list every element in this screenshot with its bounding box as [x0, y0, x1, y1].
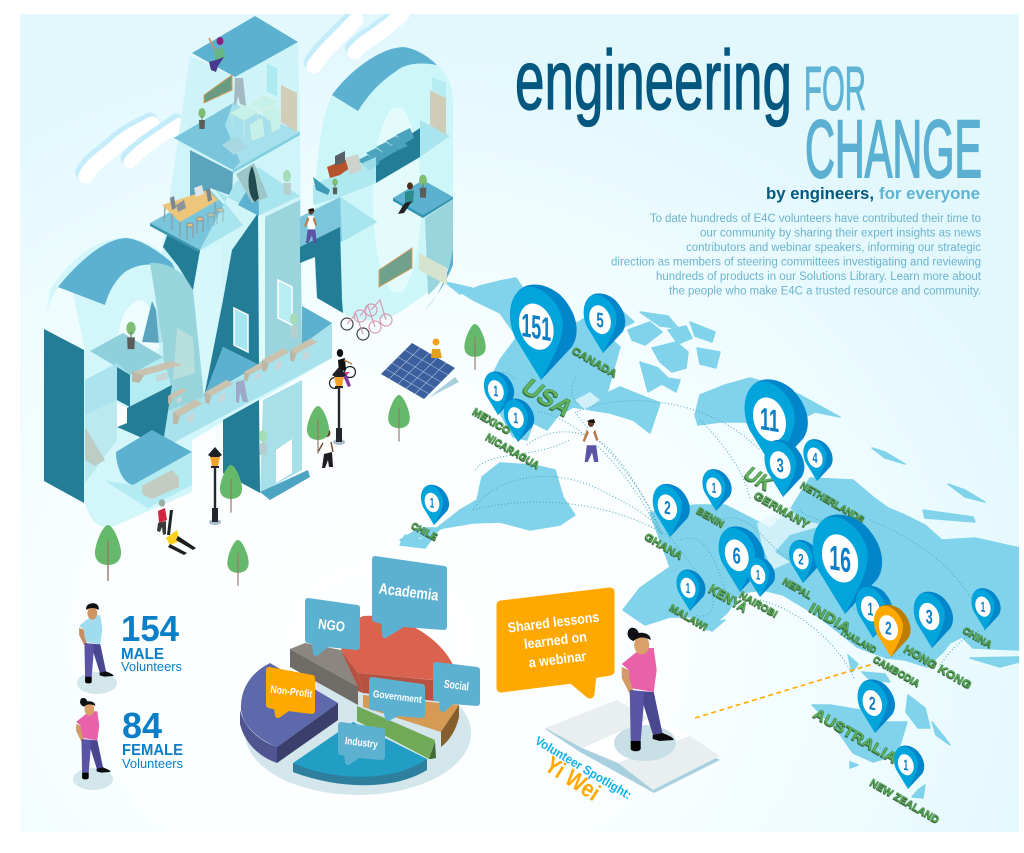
stairs [236, 163, 268, 203]
person: seated right [398, 182, 414, 214]
stairs E [85, 427, 105, 466]
pie chart: sectors [240, 616, 471, 795]
letter 4 body: translucent glass [155, 42, 302, 412]
label: CAMBODIA: CAMBODIA [871, 654, 922, 689]
stats: male volunteers [77, 603, 182, 694]
bubble: Social: Social [443, 679, 470, 694]
pin: Cambodia 2 highlighted: 2 [885, 617, 892, 639]
letter E: outer pale glow [44, 280, 85, 350]
label: NEPAL: NEPAL [781, 576, 814, 601]
pin: Netherlands 4 [803, 439, 833, 481]
label: CANADA: CANADA [570, 345, 620, 380]
pin: Hong Kong 3 [914, 592, 953, 648]
sector NGO side [290, 649, 358, 705]
classroom: pale desk [222, 136, 248, 155]
sector Government top [357, 706, 435, 759]
sector Academia top [341, 616, 455, 682]
label: GHANA: GHANA [642, 531, 685, 562]
4: dark diagonal face [163, 233, 200, 290]
C: left upper floor [313, 157, 376, 205]
sector Academia side [358, 673, 453, 703]
lamp post: left [208, 447, 222, 525]
classroom: bookshelf [281, 85, 297, 132]
clouds [83, 12, 402, 176]
pale plants [290, 313, 298, 338]
C plant [419, 175, 427, 198]
C: dark bar lower [300, 227, 343, 313]
letter E: dark left face [44, 329, 84, 503]
C: right floor edge [393, 197, 453, 218]
pin: Germany 3 [764, 440, 804, 497]
trees [95, 324, 486, 586]
pin: India 16: 16 [829, 538, 851, 581]
bubble: Government [372, 680, 423, 718]
E plant [126, 322, 136, 349]
pin: New Zealand 1: 1 [903, 757, 909, 775]
person: teacher [234, 78, 246, 106]
pin: Malawi 1: 1 [686, 581, 690, 597]
C: right floor [393, 180, 453, 215]
4: narrow pale column [259, 212, 265, 362]
title block [515, 33, 982, 298]
label: CHINA: CHINA [961, 625, 994, 650]
label: NEW ZEALAND: NEW ZEALAND [868, 778, 941, 826]
sector Social side [441, 705, 459, 747]
4: slanted blue-grey wall [190, 150, 233, 196]
map: world continents [400, 278, 1020, 798]
solar panel [381, 343, 459, 399]
tagline second part: for everyone [879, 185, 980, 203]
label: AUSTRALIA: AUSTRALIA [810, 705, 900, 767]
C: blue bottom sliver [425, 248, 453, 310]
person: walking on map [583, 419, 598, 462]
bubble: Academia: Academia [378, 580, 440, 605]
pin: Benin 1: 1 [712, 480, 716, 497]
pin: China 1 [971, 588, 1001, 630]
tagline: by engineers, [766, 185, 874, 203]
E: upper floor [90, 333, 163, 375]
pin: Kenya 6: 6 [733, 542, 741, 569]
E: lower floor [105, 452, 192, 508]
E: pale floor band [85, 363, 130, 415]
4: lightest diagonal band [201, 369, 206, 396]
classroom: tables and chairs [231, 96, 280, 140]
letter E: top arc [58, 238, 176, 305]
female label: FEMALE [122, 742, 183, 759]
pin: Nairobi 1: 1 [756, 566, 760, 583]
sector Academia inner edge [341, 650, 363, 693]
C bookshelves [430, 90, 446, 135]
pin: Germany 3: 3 [777, 455, 784, 478]
pin: Nicaragua 1 [504, 398, 534, 442]
person: walker near tree [318, 429, 333, 468]
office: red desk and computer [313, 151, 362, 195]
intro paragraph: hundreds of products in our Solutions Library. Learn more about [656, 271, 982, 283]
label: CHILE: CHILE [409, 520, 439, 543]
pin: UK 11 [745, 379, 808, 470]
pin: China 1: 1 [981, 599, 985, 616]
4: blue wedge at floor [204, 347, 259, 397]
pin: Benin 1 [702, 469, 732, 511]
pallet jack worker [157, 499, 196, 555]
E tall frame [173, 328, 195, 380]
dashed callout line to Cambodia [695, 664, 873, 718]
label: THAILAND: THAILAND [839, 626, 878, 655]
stair dark wedge [249, 166, 259, 202]
letter E: inner arch [118, 300, 160, 352]
intro paragraph: contributors and webinar speakers, informing our strategic [686, 242, 981, 254]
pin: Ghana 2 [653, 484, 690, 537]
intro paragraph: our community by sharing their expert insights as news [700, 228, 981, 240]
male figure [79, 603, 113, 683]
label: MALAWI: MALAWI [667, 603, 709, 633]
bubble: NGO [308, 601, 357, 653]
volunteer spotlight: speech bubble: a webinar [528, 648, 588, 671]
E: dark front edge [117, 367, 130, 407]
bubble: Social [436, 665, 477, 709]
volunteer spotlight: figure shadow [614, 725, 676, 761]
label: UK: UK [738, 463, 779, 495]
intro paragraph: To date hundreds of E4C volunteers have contributed their time to [650, 213, 981, 225]
plant pale third floor [283, 170, 291, 195]
C chalkboard [379, 248, 412, 287]
pin: USA 151: 151 [521, 307, 551, 349]
C: pale floor [420, 120, 450, 157]
4: lower dark column [223, 400, 260, 493]
office plant [332, 178, 338, 194]
pin: Nepal 2 [789, 540, 819, 583]
4: second floor [174, 103, 300, 170]
4: pale side of third floor [200, 167, 300, 250]
intro paragraph: the people who make E4C a trusted resource and community. [669, 286, 981, 298]
E: white gap window [117, 403, 127, 427]
sofa [142, 470, 179, 499]
pale plant [259, 430, 267, 455]
label: GERMANY: GERMANY [752, 490, 812, 531]
office desks on long floor [132, 338, 317, 425]
workshop desk [162, 185, 218, 238]
letter E: dark arch piece [142, 301, 162, 343]
female shadow [73, 768, 113, 790]
pin: Nepal 2: 2 [798, 551, 804, 569]
E/4: blue floor patch [302, 306, 332, 345]
4: floor edge [150, 223, 200, 253]
classroom: plant [198, 108, 206, 129]
male shadow [77, 672, 117, 694]
volunteer spotlight: figure Yi Wei [622, 628, 674, 751]
label: KENYA: KENYA [706, 581, 751, 615]
female sublabel: Volunteers [122, 756, 183, 771]
4: dark central column [204, 213, 259, 397]
pin: Nicaragua 1: 1 [513, 410, 519, 428]
pin: Malawi 1 [677, 570, 705, 611]
male label: MALE [121, 646, 164, 663]
volunteer spotlight: speech bubble: Shared lessons [507, 608, 600, 636]
volunteer spotlight: caption: Volunteer Spotlight: [532, 734, 634, 802]
pin: Mexico 1 [484, 371, 514, 415]
sector Non-Profit end [277, 703, 338, 763]
4: lower pale face [260, 380, 302, 493]
4: top roof [192, 16, 298, 77]
C low shelf [419, 253, 447, 285]
E: pale upper wall [130, 357, 171, 407]
E: blue curved slab [116, 430, 192, 485]
map: light inland seas [575, 392, 825, 570]
letter C: top arc [332, 47, 437, 111]
sector Non-Profit top [241, 663, 338, 747]
bubble: Government: Government [372, 689, 423, 706]
pin: Ghana 2: 2 [664, 496, 671, 518]
label: HONG KONG: HONG KONG [902, 643, 973, 692]
pin: Chile 1: 1 [430, 494, 434, 511]
classroom: chalkboard [204, 75, 232, 103]
bubble: NGO: NGO [317, 615, 346, 635]
bubble: Industry: Industry [344, 735, 379, 751]
male count: 154 [121, 608, 179, 649]
person: solar worker [431, 338, 442, 358]
pin: Kenya 6 [719, 526, 765, 592]
stats: female volunteers [73, 698, 183, 790]
lamp post: right [332, 367, 346, 445]
sector Non-Profit side [240, 710, 277, 763]
pin: Australia 2: 2 [869, 692, 876, 714]
pin: Chile 1 [421, 485, 449, 525]
C window [432, 77, 446, 98]
letter C body: translucent glass [315, 52, 453, 320]
standing figure on floor [236, 380, 248, 403]
volunteer spotlight: open book [545, 700, 720, 793]
4: doorway [276, 439, 292, 483]
label: INDIA: INDIA [807, 599, 854, 636]
letter E body: translucent glass [44, 238, 332, 528]
pin: Thailand 1: 1 [867, 598, 873, 620]
label: NAIROBI: NAIROBI [737, 590, 779, 620]
volunteer spotlight: speech bubble [501, 592, 610, 694]
pin: New Zealand 1 [894, 745, 924, 789]
label: MEXICO: MEXICO [470, 406, 513, 437]
4: window column [259, 200, 302, 365]
bubble: Academia [375, 559, 444, 635]
volunteer spotlight: speech bubble: learned on [523, 628, 588, 652]
title block: FOR [804, 55, 866, 124]
pin: Thailand 1 [856, 586, 893, 638]
sector Industry top [293, 722, 427, 777]
C: right pale wall [425, 199, 453, 295]
sector Social top [363, 695, 459, 732]
person: sitter on roof [209, 37, 225, 72]
intro paragraph: direction as members of steering committees investigating and reviewing [611, 256, 981, 268]
E: translucent floor left [85, 400, 117, 483]
pin: India 16 [813, 514, 882, 614]
4: window [234, 308, 248, 352]
C: dark bar [376, 128, 420, 183]
pin: Canada 5 [584, 293, 625, 353]
person: girl on beam [304, 208, 317, 243]
sector Industry side [293, 759, 427, 785]
title: engineering: engineering [515, 33, 792, 127]
bubble: Non-Profit: Non-Profit [270, 684, 313, 701]
map: dotted connection arcs [473, 372, 985, 768]
C: middle floor [300, 197, 377, 247]
intro paragraph [611, 213, 982, 298]
C: pale floor extension [340, 197, 377, 242]
letter C: inner counter [373, 107, 421, 293]
E: lower dark wedge [117, 385, 172, 440]
pin: Mexico 1: 1 [493, 383, 499, 401]
volunteer spotlight: name: Yi Wei [540, 751, 605, 807]
label: NICARAGUA: NICARAGUA [484, 431, 542, 472]
pin: UK 11: 11 [760, 400, 779, 439]
person: cyclist [330, 349, 356, 388]
pin: Australia 2 [858, 679, 895, 733]
4: upper window [266, 62, 278, 98]
label: NETHERLANDS: NETHERLANDS [798, 480, 866, 526]
label: BENIN: BENIN [695, 506, 726, 529]
E/4: long floor [164, 323, 332, 443]
bubble: Industry [341, 725, 382, 762]
sector Government end [429, 741, 436, 759]
pin: Hong Kong 3: 3 [926, 606, 933, 629]
4: doorstep [260, 470, 310, 500]
C: stairs [358, 128, 414, 171]
workshop stools [186, 208, 224, 240]
pin: Nairobi 1 [747, 557, 775, 597]
pin: Netherlands 4: 4 [812, 450, 818, 467]
female count: 84 [122, 705, 162, 746]
4: second floor edge [233, 132, 300, 173]
sector NGO top [290, 643, 358, 687]
label: USA: USA [515, 375, 579, 422]
4: blue wedge above dark column [238, 172, 259, 216]
female figure [76, 698, 110, 779]
pie base shadow [245, 671, 471, 795]
4: third floor [150, 190, 243, 250]
4: second floor darker part [174, 103, 240, 170]
pin: USA 151 [510, 285, 577, 380]
4: upper window frame [278, 280, 292, 325]
bicycles [341, 300, 392, 340]
pin: Cambodia 2 highlighted [874, 605, 911, 657]
4: diagonal blue-grey band [150, 263, 204, 414]
bubble: Non-Profit [269, 670, 313, 715]
pin: Canada 5: 5 [596, 309, 604, 333]
male sublabel: Volunteers [121, 659, 182, 674]
